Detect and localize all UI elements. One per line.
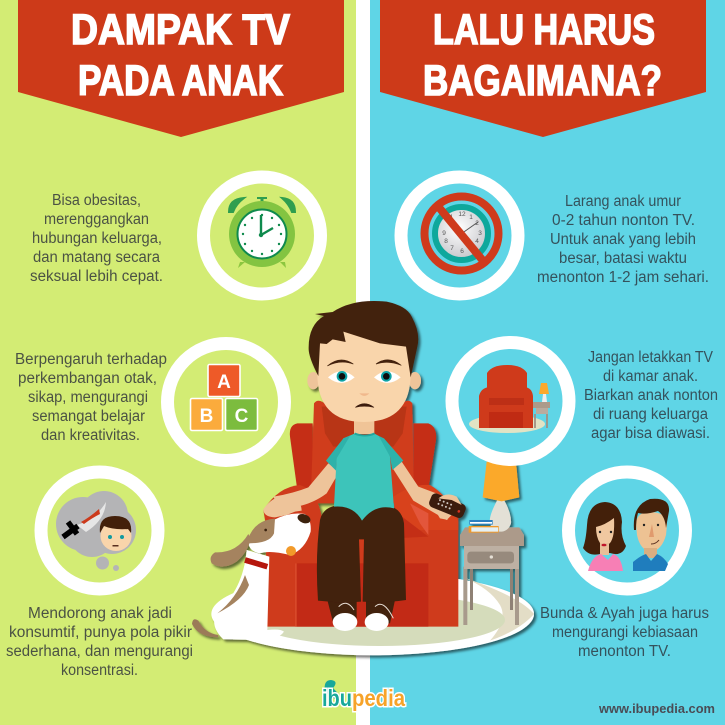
text block: konsumtif: sederhana, dan mengurangi [6,643,193,660]
text block: konsumtif [6,605,193,679]
icon: armchair and rug in ring [452,342,569,460]
icon: abc blocks in ring [168,344,284,460]
icon: thought bubble with knife and boy in ring [41,472,158,589]
text block: jangan letakkan tv: agar bisa diawasi. [591,425,710,442]
text block: perkembangan otak: Berpengaruh terhadap [15,351,167,368]
text block: obesitas [30,192,163,285]
text block: jangan letakkan tv: di kamar anak. [603,368,698,385]
banner: dampak tv [18,0,344,137]
side table [460,527,524,625]
icon: no clock in ring: 4 [475,238,479,245]
icon: no clock in ring: 11 [447,214,454,221]
icon: no clock in ring: 6 [460,248,464,255]
boy: head [307,301,421,422]
text block: obesitas: hubungan keluarga, [32,230,162,247]
text block: konsumtif: Mendorong anak jadi [28,605,172,622]
boy: arms [273,462,460,520]
text block: jangan letakkan tv: di ruang keluarga [593,406,708,423]
dog: tag [286,546,296,556]
text block: perkembangan otak: sikap, mengurangi [28,389,148,406]
text block: jangan letakkan tv: Biarkan anak nonton [584,387,718,404]
icon: abc blocks in ring: A [217,372,231,393]
icon: no clock in ring: 3 [478,230,482,237]
text block: obesitas: Bisa obesitas, [52,192,141,209]
icon: mother and father in ring [568,472,686,589]
text block: konsumtif: konsentrasi. [61,662,138,679]
text block: bunda dan ayah: Bunda & Ayah juga harus [540,605,709,622]
logo: ibupedia: pedia [352,685,405,711]
text block: larang anak: 0-2 tahun nonton TV. [552,212,695,229]
banner: lalu harus bagaimana [380,0,706,137]
text block: bunda dan ayah [540,605,709,660]
text block: bunda dan ayah: menonton TV. [578,643,671,660]
logo: ibupedia: ibu [322,685,352,711]
heading: dampak tv pada anak: DAMPAK TV [71,6,290,54]
logo: ibupedia [322,680,405,711]
boy: legs and shoes [317,505,406,631]
icon: alarm clock in ring [204,177,320,294]
text block: perkembangan otak [15,351,167,444]
background: left green panel [0,0,356,725]
icon: no clock in ring: 7 [450,245,454,252]
heading: lalu harus bagaimana: LALU HARUS [433,6,655,54]
icon: abc blocks in ring: B [200,406,213,427]
books [469,520,499,533]
icon: no clock in ring: 9 [442,230,446,237]
text block: obesitas: dan matang secara [33,249,160,266]
text block: bunda dan ayah: mengurangi kebiasaan [552,624,698,641]
heading: lalu harus bagaimana: BAGAIMANA? [423,57,662,105]
icon: no clock in ring [401,177,518,294]
icon: no clock in ring: 8 [444,238,448,245]
boy [273,301,467,631]
website url: www.ibupedia.com [598,701,715,716]
text block: larang anak: Untuk anak yang lebih [550,231,696,248]
text block: larang anak [537,193,709,286]
icon: no clock in ring: 2 [475,220,479,227]
text block: perkembangan otak: perkembangan otak, [18,370,157,387]
icon: no clock in ring: 1 [469,214,473,221]
dog: body [214,550,284,640]
boy: neck [354,417,374,434]
heading: dampak tv pada anak [71,6,290,105]
text block: perkembangan otak: semangat belajar [32,408,145,425]
armchair [263,401,458,627]
icon: abc blocks in ring: C [235,406,249,427]
icon: father [633,499,669,571]
heading: lalu harus bagaimana [423,6,662,105]
text block: perkembangan otak: dan kreativitas. [41,427,140,444]
heading: dampak tv pada anak: PADA ANAK [78,57,283,105]
text block: larang anak: menonton 1-2 jam sehari. [537,269,709,286]
dog: body patch [217,575,249,613]
dog [192,512,312,640]
boy: t-shirt [326,433,403,521]
boy: hand with remote [428,492,467,520]
boy: hand on dog [263,496,302,517]
text block: jangan letakkan tv [584,349,718,442]
text block: konsumtif: konsumtif, punya pola pikir [9,624,192,641]
dog: tail [192,619,218,637]
text block: larang anak: Larang anak umur [565,193,681,210]
dog: head [248,513,311,555]
rug [211,573,534,655]
text block: larang anak: besar, batasi waktu [559,250,687,267]
icon: mother [583,502,626,571]
text block: obesitas: seksual lebih cepat. [30,268,163,285]
dog: collar [245,560,267,567]
illustration: boy on armchair with dog [192,301,534,655]
dog: ear [211,534,251,567]
text block: jangan letakkan tv: Jangan letakkan TV [588,349,714,366]
icon: no clock in ring: 12 [458,211,466,218]
background: right blue panel [370,0,725,725]
text block: obesitas: merenggangkan [44,211,149,228]
lamp [483,462,519,532]
